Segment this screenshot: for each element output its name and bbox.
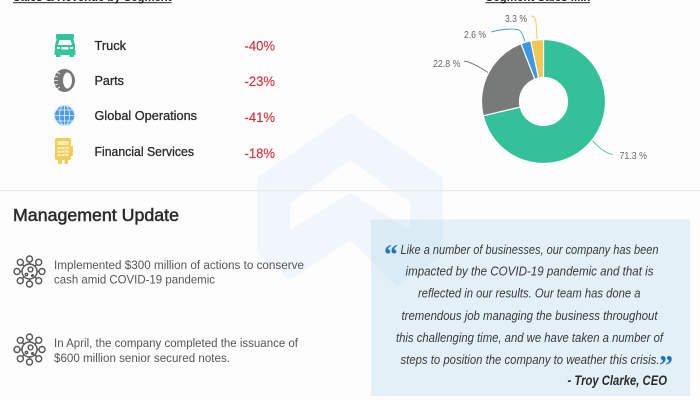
panel: CEO quote [371, 220, 690, 396]
slice: parts [482, 44, 535, 116]
icon: virus [14, 256, 45, 287]
quote attribution: - Troy Clarke, CEO [568, 373, 667, 388]
value: global operations change: -41% [244, 110, 275, 125]
icon: closing quote mark: ” [659, 351, 673, 382]
bullet: cash actions [14, 256, 304, 287]
quote text: tremendous job managing the business throughout [402, 308, 659, 323]
quote text: this challenging time, and we have taken a number of [396, 330, 664, 345]
slice: truck [483, 40, 606, 164]
text: cash actions: cash amid COVID-19 pandemic [54, 273, 215, 287]
quote text: Like a number of businesses, our company has been [400, 242, 658, 257]
label: global operations: Global Operations [94, 108, 197, 123]
heading: management update: Management Update [13, 205, 179, 225]
leader line: 2.6 percent [491, 29, 525, 42]
quote text [396, 242, 664, 367]
text: senior secured notes: In April, the company completed the issuance of [54, 336, 299, 350]
donut chart: segment sales mix [433, 13, 647, 164]
icon: globe [54, 105, 75, 126]
label: parts: Parts [94, 73, 124, 88]
text: cash actions: Implemented $300 million of actions to conserve [54, 258, 304, 272]
label: 2.6 percent: 2.6 % [464, 29, 486, 41]
quote text: steps to position the company to weather this crisis. [400, 352, 660, 367]
leader line: 22.8 percent [464, 61, 488, 72]
slice: financial services [531, 40, 544, 78]
text: cash actions [54, 258, 304, 287]
value: financial services change: -18% [244, 146, 275, 161]
leader line: 3.3 percent [531, 16, 537, 39]
text: senior secured notes: $600 million senior secured notes. [54, 351, 230, 365]
quote text: reflected in our results. Our team has done a [418, 286, 640, 301]
value: truck change: -40% [244, 38, 275, 54]
icon: payment terminal [55, 138, 73, 164]
label: 22.8 percent: 22.8 % [433, 58, 460, 70]
label: truck: Truck [94, 38, 126, 53]
label: 3.3 percent: 3.3 % [505, 13, 527, 25]
icon: tire [54, 69, 75, 92]
icon: truck [54, 34, 76, 57]
icon: opening quote mark: “ [384, 240, 398, 271]
label: 71.3 percent: 71.3 % [620, 150, 647, 162]
bullet: senior secured notes [14, 334, 299, 365]
leader line: 71.3 percent [592, 140, 612, 154]
value: parts change: -23% [244, 74, 275, 89]
slice: global operations [521, 41, 539, 79]
text: senior secured notes [54, 336, 299, 365]
label: financial services: Financial Services [94, 144, 194, 159]
icon: virus [14, 334, 45, 365]
segment list [54, 34, 275, 164]
quote text: impacted by the COVID-19 pandemic and that is [406, 264, 654, 279]
